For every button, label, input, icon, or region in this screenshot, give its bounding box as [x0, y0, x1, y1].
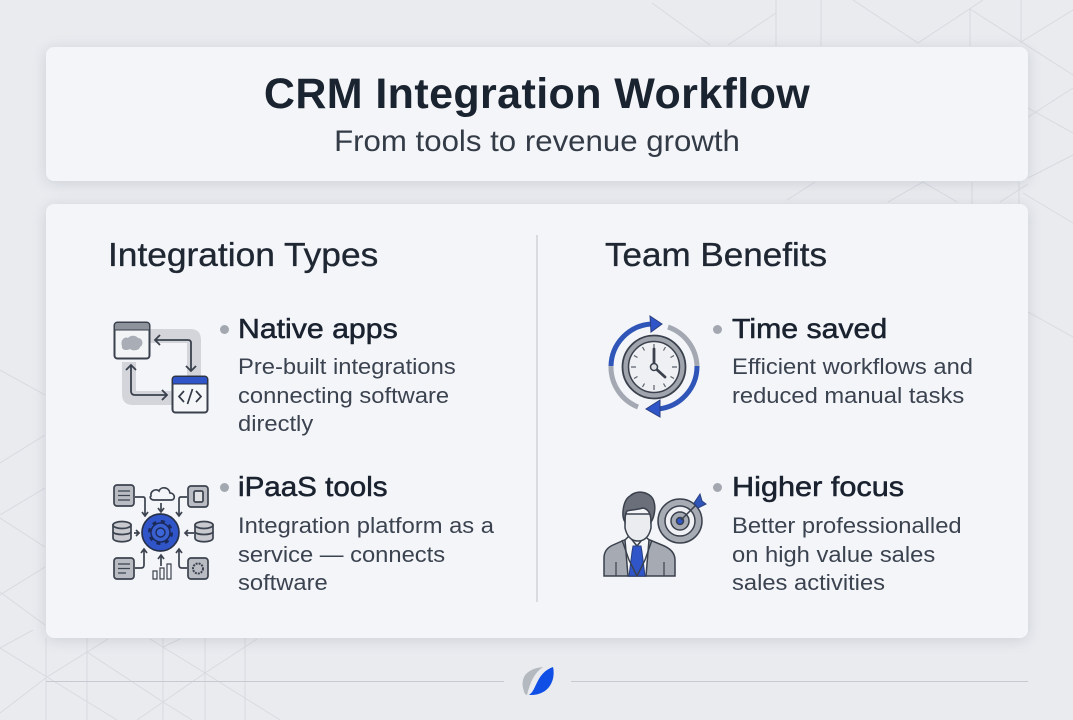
text: native apps [238, 354, 456, 436]
text: native apps: connecting software [238, 382, 449, 408]
title: CRM Integration Workflow [264, 70, 810, 118]
text: time saved: reduced manual tasks [732, 382, 964, 408]
heading: time saved: Time saved [732, 313, 887, 344]
icon: clock with arrows [608, 315, 700, 418]
text: higher focus [732, 513, 962, 595]
footer rule right [571, 681, 1028, 682]
subtitle: From tools to revenue growth [334, 125, 740, 158]
heading: ipaas tools: iPaaS tools [238, 471, 388, 502]
main panel [46, 204, 1028, 638]
footer rule left [46, 681, 504, 682]
bullet: time saved [713, 325, 722, 334]
text: time saved: Efficient workflows and [732, 354, 973, 379]
text: higher focus: sales activities [732, 570, 885, 595]
icon: native apps [114, 322, 208, 414]
heading: integration types: Integration Types [108, 236, 378, 273]
heading: higher focus: Higher focus [732, 471, 904, 502]
text: higher focus: Better professionalled [732, 513, 962, 538]
bullet: higher focus [713, 483, 722, 492]
text: ipaas tools: Integration platform as a [238, 513, 494, 538]
bullet: ipaas tools [220, 483, 229, 492]
logo [522, 667, 554, 695]
text: ipaas tools: software [238, 570, 328, 595]
text: native apps: directly [238, 411, 313, 436]
text: time saved [732, 354, 973, 408]
text: higher focus: on high value sales [732, 542, 935, 566]
icon: person with target [603, 491, 707, 577]
icon: ipaas tools [112, 484, 214, 580]
text: native apps: Pre-built integrations [238, 354, 456, 379]
header panel [46, 47, 1028, 181]
text: ipaas tools: service — connects [238, 542, 445, 566]
heading: team benefits: Team Benefits [605, 236, 827, 273]
heading: native apps: Native apps [238, 313, 398, 344]
divider [536, 235, 538, 602]
bullet: native apps [220, 325, 229, 334]
text: ipaas tools [238, 513, 494, 595]
